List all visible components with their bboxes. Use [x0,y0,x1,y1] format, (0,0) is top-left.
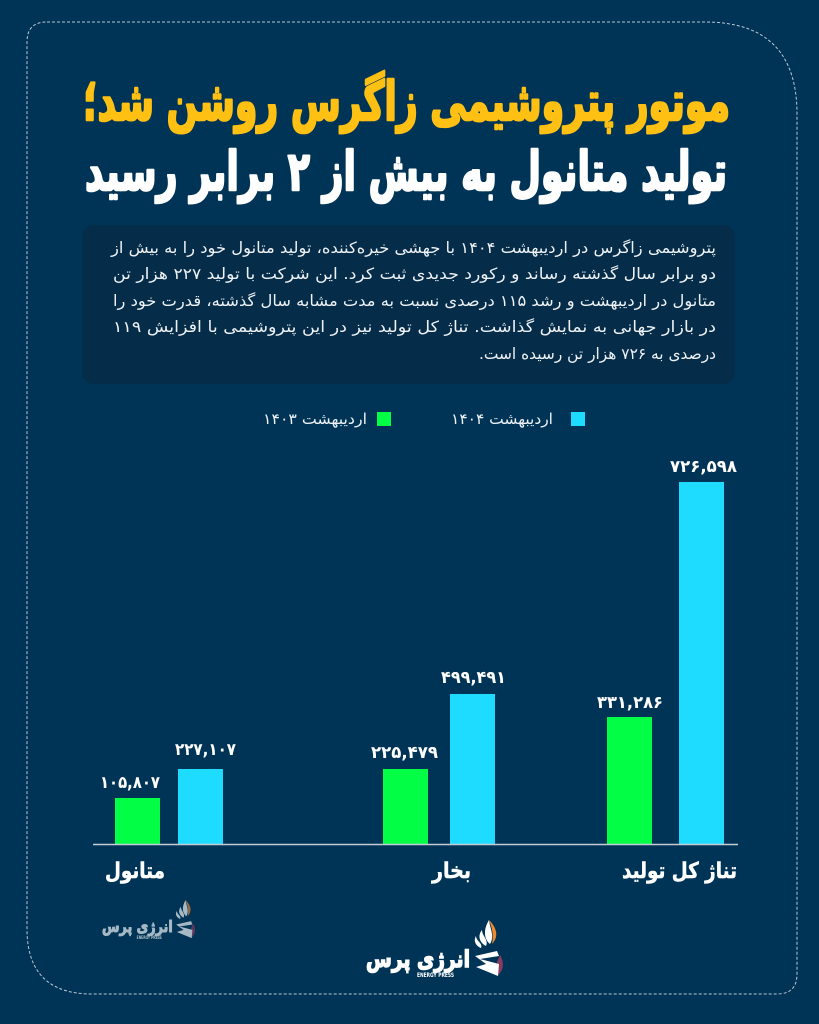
group: steam [371,668,506,884]
group: total [597,457,738,884]
legend: 1404: اردیبهشت ۱۴۰۴ [451,410,553,428]
summary text: متانول در اردیبهشت و رشد ۱۱۵ درصدی نسبت به مدت مشابه سال گذشته، قدرت خود را [113,292,716,311]
group: steam: ۲۲۵,۴۷۹ [371,743,439,763]
group: total: ۳۳۱,۲۸۶ [597,693,663,713]
summary text: درصدی به ۷۲۶ هزار تن رسیده است. [479,345,716,363]
logo: watermark [102,900,195,940]
legend [263,410,585,428]
summary text: دو برابر سال گذشته رساند و رکورد جدیدی ثبت کرد. این شرکت با تولید ۲۲۷ هزار تن [113,265,716,284]
logo: watermark: ENERGY PRESS [137,935,162,940]
group: methanol: ۲۲۷,۱۰۷ [175,740,237,760]
summary text: پتروشیمی زاگرس در اردیبهشت ۱۴۰۴ با جهشی خیره‌کننده، تولید متانول خود را به بیش از [110,239,716,258]
group: total: ۷۲۶,۵۹۸ [670,457,738,477]
summary text [110,239,716,363]
title [83,70,730,203]
logo: watermark: انرژی پرس [102,917,173,937]
logo wordmark: انرژی پرس [366,947,470,973]
group: methanol: ۱۰۵,۸۰۷ [100,773,161,793]
logo: Energy Press [366,920,503,979]
group: steam: ۴۹۹,۴۹۱ [441,668,506,688]
group: steam: بخار [431,859,471,884]
logo latin name: ENERGY PRESS [417,972,454,979]
summary text: در بازار جهانی به نمایش گذاشت. تناژ کل تولید نیز در این پتروشیمی با افزایش ۱۱۹ [113,318,716,337]
group: methanol [100,740,237,884]
group: total: تناژ کل تولید [622,859,737,884]
panel: summary [82,225,735,384]
icon: flame [475,920,503,976]
bar chart [93,457,738,884]
legend: 1403: اردیبهشت ۱۴۰۳ [263,410,367,428]
group: methanol: متانول [105,859,165,884]
